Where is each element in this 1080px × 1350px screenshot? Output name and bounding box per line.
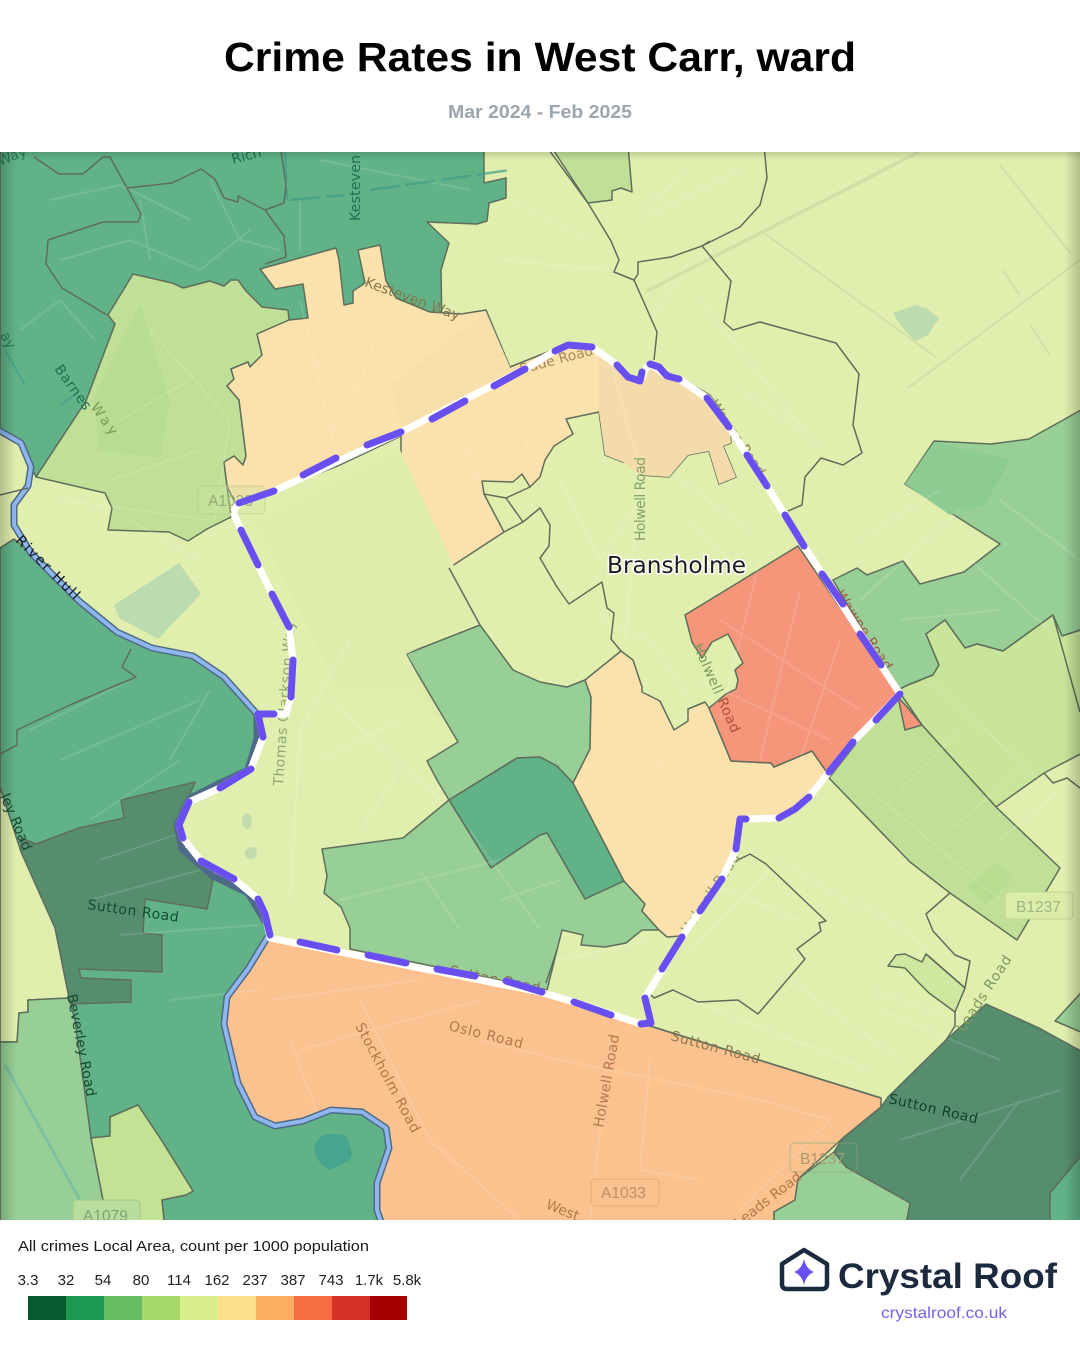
road labels: Kesteven [348, 155, 364, 221]
road labels: Holwell Road [591, 1033, 623, 1129]
road labels: Leads Road [954, 953, 1015, 1035]
legend tick labels: 743 [318, 1272, 344, 1289]
internal boundary lines [0, 145, 1080, 1098]
road labels: West [544, 1197, 582, 1225]
river hull [0, 431, 389, 1225]
drains and waterways [5, 152, 510, 1200]
legend tick labels: 114 [167, 1272, 191, 1289]
legend colour scale [28, 1296, 407, 1320]
road network [20, 152, 1080, 1220]
road labels: Holwell Road [678, 850, 744, 937]
road badge: A1079: A1079 [83, 1208, 128, 1225]
road labels [0, 144, 1015, 1231]
road labels: Wawne Road [706, 397, 768, 479]
logo: Crystal Roof [782, 1250, 1057, 1322]
road labels: Bude Road [518, 343, 595, 378]
road badge: A1033 north: A1033 [208, 493, 253, 510]
road labels: Sutton Road [887, 1091, 979, 1127]
road badge: A1033 north [198, 486, 265, 514]
map edge shading [0, 152, 1080, 1220]
road labels: Holwell Road [689, 641, 743, 735]
subtitle: date range: Mar 2024 - Feb 2025 [448, 102, 632, 122]
road labels: Leads Road [732, 1169, 805, 1231]
road labels: River Hull [12, 533, 83, 603]
road badge: B1237 east: B1237 [1016, 899, 1061, 916]
road labels: Wawne Road [832, 587, 895, 673]
logo wordmark: Crystal Roof [838, 1257, 1057, 1296]
legend tick labels: 80 [133, 1272, 149, 1289]
road badge: B1237 east [1005, 892, 1073, 919]
road labels: Holwell Road [633, 457, 649, 541]
road labels: Oslo Road [447, 1018, 525, 1052]
legend tick labels: 237 [242, 1272, 268, 1289]
road labels: Sutton Road [86, 897, 180, 926]
road labels: Sutton Road [669, 1028, 762, 1068]
legend [18, 1238, 422, 1320]
legend tick labels: 1.7k [355, 1272, 384, 1289]
road badge: A1033 south [591, 1179, 659, 1206]
road badge: A1033 south: A1033 [601, 1185, 646, 1202]
legend tick labels: 32 [58, 1272, 74, 1289]
legend tick labels: 54 [95, 1272, 111, 1289]
title: Crime Rates in West Carr, ward [224, 34, 856, 80]
road labels: Barnes [51, 362, 94, 413]
legend tick labels: 162 [204, 1272, 230, 1289]
ward boundary: white line [179, 345, 900, 1024]
road badge: B1237 south [790, 1143, 857, 1172]
road labels: Kesteven Way [363, 275, 462, 324]
place label: Bransholme: Bransholme [607, 553, 746, 579]
legend tick labels: 3.3 [18, 1272, 38, 1289]
road labels: Thomas Clarkson Way [271, 621, 299, 787]
ponds in park [242, 813, 257, 859]
legend title: All crimes Local Area, count per 1000 population [18, 1238, 369, 1255]
road labels: Beverley Road [63, 993, 99, 1098]
legend tick labels [18, 1272, 422, 1289]
icon: house outline with star [782, 1250, 827, 1289]
road badge: A1079 [72, 1200, 140, 1220]
road labels: Stockholm Road [351, 1020, 423, 1136]
lake: pale pond [893, 305, 939, 341]
tonal patches [114, 312, 1010, 676]
legend tick labels: 387 [280, 1272, 306, 1289]
road labels: Sutton Road [448, 963, 542, 996]
legend tick labels: 5.8k [393, 1272, 422, 1289]
road labels: Way [87, 400, 121, 438]
road badge: B1237 south: B1237 [800, 1151, 845, 1168]
lake: teal pond [315, 1134, 352, 1170]
ward boundary: purple dashes [179, 345, 900, 1024]
road labels: Rich [230, 145, 263, 168]
logo url: crystalroof.co.uk [881, 1305, 1008, 1322]
